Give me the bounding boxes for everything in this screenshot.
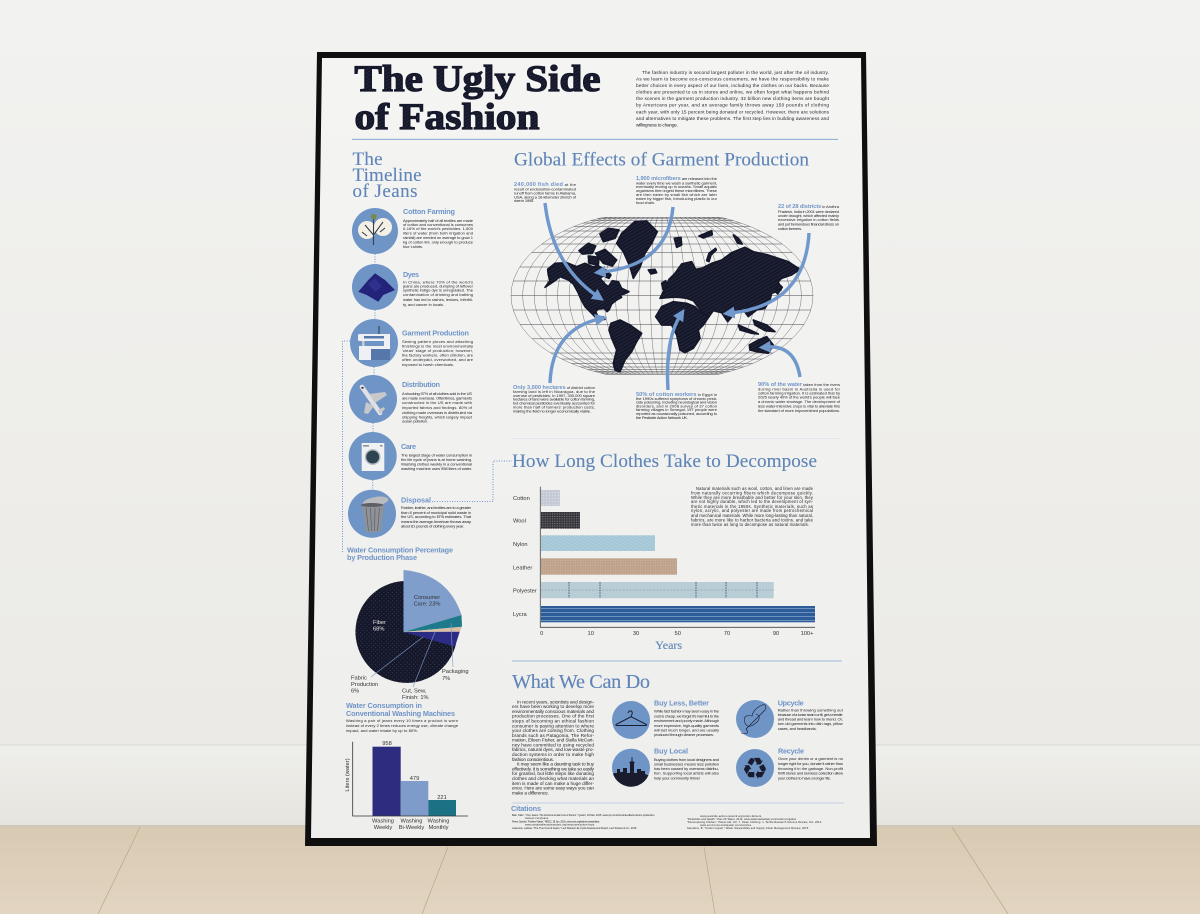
- text: buy less better: produced through cleaner processes.: [654, 732, 714, 737]
- text: garment production: 'clean' stage of production; however,: [402, 348, 473, 353]
- intro paragraph: clothes are presented to us in stores and online, we often forget what happens behind: [636, 90, 829, 94]
- text: care: the life cycle of jeans is at home washing.: [401, 457, 472, 462]
- callout: water: a chronic water shortage. The development of: [758, 399, 841, 404]
- timeline connectors: [342, 254, 512, 553]
- bar chart: washing frequency: 958: [382, 741, 392, 747]
- text: upcycle: Upcycle: [778, 699, 804, 708]
- bar chart: washing frequency: Weekly: [374, 825, 392, 831]
- callout: microfibers: water every time we wash a synthetic garment,: [636, 180, 717, 186]
- heading: water consumption percentage: [347, 546, 453, 562]
- text: cotton farming: 0-16% of the world's pesticides. 1,500: [403, 226, 474, 231]
- callout: water: [758, 382, 841, 413]
- text: what we can do paragraph: environmentally conscious materials and: [512, 709, 594, 714]
- bar chart: washing frequency: Washing: [428, 818, 449, 824]
- icon: skyline: [612, 748, 650, 787]
- text: recycle: throwing it in the garbage. Non-profit: [778, 766, 844, 771]
- timeline: cotton farming: [352, 207, 474, 254]
- heading: what we can do: What We Can Do: [512, 671, 650, 693]
- intro paragraph: willingness to change.: [636, 122, 678, 128]
- text: decomposition explanation: nylon, acrylic, and polyester are made from petrochemical: [691, 508, 813, 513]
- bar chart: decomposition: Polyester: [513, 588, 537, 594]
- citations: Perez, Sandra. "Fashion Waste." NRDC, 18 Jan. 2016, www.nrdc.org/fashion-waste/facts.: [512, 820, 600, 824]
- bar chart: decomposition: 30: [633, 631, 639, 637]
- heading: water consumption percentage: by Production Phase: [347, 553, 417, 562]
- heading: The Timeline of Jeans: [352, 149, 422, 202]
- heading: global effects: Global Effects of Garment Production: [514, 150, 809, 171]
- text: buy less better: will last much longer, and are usually: [654, 728, 720, 733]
- text: what we can do paragraph: In recent years, scientists and design-: [517, 699, 594, 704]
- text: care: [401, 442, 472, 471]
- text: decomposition explanation: and mechanical materials. While more long-lasting than natural,: [691, 513, 813, 518]
- heading and text: washing machines: instead of every 2 times reduces energy use, climate change: [346, 723, 459, 728]
- icon: needle and thread: [736, 700, 774, 738]
- citations: [511, 804, 822, 830]
- bar chart: washing frequency: Washing: [372, 818, 394, 824]
- bar chart: decomposition: Cotton: [513, 496, 530, 502]
- action: upcycle: [736, 699, 844, 738]
- bar chart: washing frequency: Liters (water): [345, 758, 351, 792]
- pie chart: water consumption: 7%: [442, 676, 450, 682]
- text: what we can do paragraph: make a difference.: [512, 790, 549, 795]
- pie chart: water consumption: Production: [351, 682, 378, 688]
- callout: districts: cotton farmers.: [778, 226, 802, 231]
- map graticule: [510, 217, 814, 375]
- intro paragraph: the scenes in the garment production industry. 32 billion new clothing items are bought: [636, 96, 830, 101]
- text: decomposition explanation: thetic materials in the 1950s. Synthetic materials, such as: [691, 504, 813, 509]
- text: buy less better: more expensive, high-quality garments: [654, 723, 719, 728]
- heading and text: washing machines: Water Consumption in: [346, 701, 422, 710]
- timeline: care: [349, 432, 472, 480]
- pie chart: water consumption: Consumer: [414, 595, 440, 601]
- icon: cotton: [352, 208, 398, 254]
- heading: The Timeline of Jeans: The: [352, 149, 382, 170]
- arrows to map: [545, 203, 809, 390]
- bar chart: decomposition: Nylon: [513, 542, 528, 548]
- bar chart: washing frequency: 479: [410, 776, 419, 782]
- text: what we can do paragraph: for granted, but little steps like donating: [512, 771, 594, 776]
- text: what we can do paragraph: effectively. It is something we take so easily: [512, 766, 595, 771]
- text: distribution: shipping freights, which largely impact: [402, 414, 473, 420]
- text: distribution: are made overseas. Oftentimes, garments: [402, 396, 472, 400]
- text: cotton farming: [403, 207, 474, 249]
- callout: microfibers: organisms then ingest these microfibers. These: [636, 188, 718, 193]
- text: buy less better: environment and poorly made. Although: [654, 718, 719, 723]
- callout: fish: result of endosulfan-contaminated: [514, 186, 576, 192]
- callout: water: 90% of the water taken from the rivers: [758, 382, 840, 388]
- bar chart: washing frequency: Washing: [401, 818, 422, 824]
- callout: water: cotton farming irrigation. It is estimated that by: [758, 390, 841, 396]
- callout: microfibers: food chain.: [636, 200, 655, 205]
- citations: www.sustainablecottonproject.org/resources/cotton-facts.: [525, 822, 595, 826]
- callout: districts: and put tremendous financial stress on: [778, 222, 839, 226]
- callout: districts: Pradesh, India in 2001 were declared: [778, 209, 839, 214]
- callout: fish: runoff from cotton farms in Alabama,: [514, 190, 576, 196]
- intro paragraph: The fashion industry is second largest polluter in the world, just after the oil industry.: [642, 70, 829, 75]
- callout: hectares: making the field no longer economically viable.: [513, 408, 591, 414]
- text: buy local: has been caused by overseas distribu-: [654, 766, 720, 771]
- map continents: [545, 221, 800, 372]
- bar chart: washing frequency: [345, 741, 468, 831]
- text: dyes: jeans are produced, dumping of leftover: [402, 284, 474, 288]
- text: recycle: your clothes to have a longer life.: [778, 776, 831, 780]
- text: disposal: [401, 496, 472, 528]
- text: what we can do paragraph: fabrics, natural dyes, and low-waste pro-: [512, 747, 594, 752]
- text: garment production: often underpaid, overworked, and are: [402, 357, 474, 362]
- text: cotton farming: four t-shirts.: [403, 244, 423, 249]
- action: buy less better: [612, 699, 720, 739]
- poster frame: [305, 52, 877, 846]
- text: decomposition explanation: fabrics, are more like to harbor bacteria and toxins, and take: [691, 518, 814, 522]
- heading and text: washing machines: [346, 701, 459, 733]
- text: recycle: [778, 746, 844, 780]
- text: decomposition explanation: While they are more breathable and better for your skin, they: [691, 495, 814, 500]
- icon: dye pile: [352, 264, 398, 310]
- pie chart: water consumption: Finish: 1%: [402, 695, 429, 701]
- text: dyes: [402, 270, 474, 307]
- bar chart: decomposition: 10: [588, 631, 594, 637]
- callout: cotton workers: disorders, and in 2008 survey of 37 cotton: [636, 404, 717, 408]
- text: distribution: constructed in the US are made with: [402, 400, 472, 405]
- text: disposal: Disposal: [401, 496, 431, 504]
- text: dyes: water has led to rashes, lesions, infertili-: [403, 297, 474, 302]
- callout: cotton workers: cide poisoning, including neurological and vision: [636, 400, 717, 404]
- text: buy less better: Buy Less, Better: [654, 699, 709, 708]
- callout: cotton workers: [636, 392, 718, 420]
- action: recycle: [736, 746, 844, 787]
- text: decomposition explanation: from naturally occurring fibers which decompose quickly.: [691, 490, 813, 496]
- callout: districts: [778, 204, 840, 231]
- callout: hectares: [513, 385, 596, 414]
- pie chart: water consumption: 68%: [373, 626, 384, 632]
- text: buy local: help your community thrive!: [654, 776, 700, 781]
- text: what we can do paragraph: mation, Eileen Fisher, and Stella McCart-: [512, 738, 594, 743]
- callout: cotton workers: 50% of cotton workers in Egypt in: [636, 392, 717, 398]
- citations: www.pesticide-action-network.org/cotton-farmers.: [700, 814, 762, 818]
- text: buy less better: [654, 699, 720, 737]
- text: buy less better: While fast fashion may seem easy in the: [654, 709, 720, 714]
- text: upcycle: cases, and headbands.: [778, 726, 817, 731]
- timeline: distribution: [349, 375, 473, 424]
- citations: Citations: [511, 804, 541, 813]
- icon: airplane: [349, 375, 397, 423]
- intro paragraph: [636, 70, 830, 128]
- text: care: The largest stage of water consumption in: [401, 452, 472, 458]
- timeline: disposal: [348, 490, 472, 538]
- citations: "Decomposing Clothes." Planet Aid, Vol. 7, Clean Clothing, 1, Textile Research Science Review, Oct. 2014.: [687, 820, 822, 824]
- callout: microfibers: 1,900 microfibers are released into the: [636, 176, 718, 182]
- text: upcycle: and thread and learn how to mend. Or,: [778, 716, 843, 721]
- text: what we can do paragraph: fashion conscientious.: [512, 757, 554, 762]
- bar chart: decomposition: 100+: [801, 631, 814, 637]
- bar chart: decomposition: 90: [773, 631, 779, 637]
- intro paragraph: As we learn to become eco-conscious consumers, we have the responsibility to make: [636, 76, 829, 82]
- bar chart: decomposition: 0: [540, 631, 543, 637]
- title: The Ugly Side: [354, 58, 600, 99]
- text: distribution: Distribution: [402, 380, 440, 389]
- timeline: garment production: [350, 319, 474, 367]
- text: what we can do paragraph: ers have been working to develop more: [512, 704, 594, 709]
- icon: recycle: ♻: [742, 752, 768, 787]
- action: buy local: [612, 748, 719, 787]
- text: buy local: Buy Local: [654, 746, 688, 755]
- callout: water: 2025 nearly 40% of the world's people will face: [758, 394, 841, 400]
- text: recycle: thrift stores and services collection allow: [778, 770, 843, 776]
- text: buy less better: cost is cheap, we forget it's harmful to the: [654, 714, 720, 719]
- text: dyes: ty, and cancer in locals.: [403, 302, 444, 307]
- callout: microfibers: eventually ending up in oceans. Small aquatic: [636, 184, 717, 189]
- callout: microfibers: are then eaten by small fish which are later: [636, 192, 718, 197]
- pie chart: water consumption: [351, 570, 469, 701]
- callout: hectares: overuse of pesticides. In 1997, 330,000 square: [513, 393, 596, 398]
- icon: washing machine: [349, 432, 397, 480]
- citations: www.qz.com/jeans.: [525, 816, 549, 820]
- text: what we can do paragraph: clothes and checking what materials an: [512, 776, 594, 781]
- callout: cotton workers: the 1990s suffered symptoms of chronic pesti-: [636, 396, 718, 401]
- text: what we can do paragraph: consumer is paying attention to where: [512, 723, 594, 728]
- text: buy local: Buying clothes from local designers and: [654, 757, 719, 762]
- text: dyes: synthetic indigo dye is unregulated. The: [403, 288, 474, 292]
- intro paragraph: by Americans per year, and an average family throws away 150 pounds of clothing: [636, 102, 829, 108]
- bar chart: decomposition: Wool: [513, 519, 526, 525]
- callout: districts: under drought, which affected mainly: [778, 213, 840, 218]
- text: what we can do paragraph: ney have committed to using recycled: [512, 742, 594, 747]
- text: garment production: the factory workers, often children, are: [402, 352, 474, 358]
- callout: hectares: farming land is left in Nicaragua, due to the: [513, 389, 596, 394]
- text: decomposition explanation: are not highly durable, which led to the development of syn-: [691, 499, 814, 504]
- text: cotton farming: liters of water (from both irrigation and: [403, 230, 473, 236]
- heading: The Timeline of Jeans: Timeline: [352, 165, 422, 186]
- callout: water: less water-intensive crops is vital to alleviate this: [758, 404, 840, 408]
- title: of Fashion: [354, 96, 540, 137]
- callout: water: the standard of more impoverished populations.: [758, 408, 840, 413]
- text: cotton farming: Cotton Farming: [403, 207, 455, 216]
- text: what we can do paragraph: item is made of can make a huge differ-: [512, 781, 594, 786]
- callout: hectares: but chemical pesticides eventually accounted for: [513, 400, 596, 406]
- text: disposal: the US, according to EPA estimates. That: [401, 514, 472, 519]
- text: disposal: means the average American throws away: [401, 519, 472, 524]
- intro paragraph: and alternatives to mitigate these problems. The first step lies in building awareness and: [636, 116, 829, 121]
- intro paragraph: each year, with only 15 percent being donated or recycled. However, there are solutions: [636, 110, 830, 114]
- text: decomposition explanation: [691, 486, 814, 527]
- title: [354, 58, 600, 137]
- callout: cotton workers: reported as occasionally poisoned, according to: [636, 411, 718, 416]
- text: distribution: A shocking 97% of all clothes sold in the US: [402, 391, 472, 396]
- timeline: dyes: [352, 264, 474, 310]
- callout: cotton workers: the Pesticide Action Network UK.: [636, 415, 688, 420]
- text: care: Washing clothes weekly in a conventional: [401, 462, 472, 466]
- callout: fish: 240,000 fish died at the: [514, 182, 577, 188]
- text: cotton farming: rainfall) are needed on average to grow 1: [403, 235, 474, 240]
- heading and text: washing machines: Washing a pair of jeans every 10 times a product is worn: [346, 718, 458, 723]
- citations: Saunders, B. "Cotton Impact." Water Stewardship and Supply Chain Management Review, 2015.: [687, 826, 809, 830]
- citations: Lawrence, Larissa. "The True Cost of Jeans." Levi Strauss Life Cycle Assessment Report, Levi Strauss & Co., 2015.: [512, 826, 637, 830]
- text: what we can do paragraph: brands such as Patagonia, The Refor-: [512, 733, 594, 738]
- text: what we can do paragraph: It may seem like a daunting task to buy: [517, 762, 595, 767]
- callout: cotton workers: farming villages in Senegal, 197 people were: [636, 407, 718, 412]
- heading: water consumption percentage: Water Consumption Percentage: [347, 546, 453, 554]
- text: upcycle: because of a loose seam or fit, get a needle: [778, 712, 843, 717]
- heading: how long clothes take to decompose: How Long Clothes Take to Decompose: [512, 451, 817, 472]
- pie chart: water consumption: Packaging: [442, 669, 469, 675]
- citations: www.environmentalleader.com/textiles.: [700, 823, 752, 827]
- pie chart: water consumption: Cut, Sew,: [402, 688, 427, 694]
- bar chart: decomposition: 70: [724, 631, 730, 637]
- pie chart: water consumption: Fiber: [373, 620, 386, 626]
- text: distribution: imported fabrics and findings. 80% of: [402, 405, 473, 410]
- text: care: Care: [401, 442, 416, 451]
- text: distribution: clothing made overseas is distributed via: [402, 410, 473, 415]
- callout: districts: 22 of 28 districts in Andhra: [778, 204, 840, 210]
- text: garment production: Garment Production: [402, 328, 469, 338]
- text: upcycle: Rather than throwing something out: [778, 708, 844, 713]
- callout: hectares: Only 3,000 hectares of district cotton: [513, 385, 595, 391]
- callout: fish: river in 1995.: [514, 198, 534, 203]
- text: what we can do paragraph: steps of becoming an ethical fashion: [512, 718, 594, 724]
- bar chart: decomposition: Leather: [513, 566, 532, 572]
- text: dyes: In China, where 70% of the world's: [403, 280, 473, 284]
- text: cotton farming: kg of cotton lint, only enough to produce: [403, 240, 474, 244]
- callout: fish: [514, 182, 577, 203]
- text: what we can do paragraph: your clothes are coming from. Clothing: [512, 728, 594, 733]
- icon: sewing machine: [350, 319, 398, 367]
- text: garment production: Sewing pattern pieces and attaching: [402, 339, 473, 344]
- citations: Bain, Marc. "Your Jeans: The Environmental Cost of Denim." Quartz, 10 Mar. 2015, www.qz.com/chemical-effects-denim-production.: [512, 813, 655, 817]
- pie chart: water consumption: 6%: [351, 688, 359, 694]
- callout: hectares: hectares of land were available for cotton farming,: [513, 396, 595, 402]
- text: buy local: tion. Supporting local artists will also: [654, 771, 720, 776]
- text: decomposition explanation: Natural materials such as wool, cotton, and linen are made: [696, 486, 814, 491]
- text: buy local: [654, 746, 720, 781]
- text: cotton farming: Approximately half of all textiles are made: [403, 218, 474, 223]
- callout: districts: excessive irrigation in cotton fields: [778, 217, 839, 222]
- text: care: washing machine uses 958 liters of water.: [401, 466, 472, 471]
- text: recycle: Once your denim or a garment is no: [778, 756, 844, 761]
- bar chart: decomposition: 50: [675, 631, 681, 637]
- world map: [510, 217, 814, 375]
- text: upcycle: turn old garments into dish rags, pillow: [778, 721, 843, 726]
- heading: The Timeline of Jeans: of Jeans: [352, 181, 418, 202]
- icon: trash can: [348, 490, 396, 538]
- bar chart: washing frequency: Bi-Weekly: [399, 825, 424, 831]
- bar chart: decomposition: [513, 487, 815, 652]
- text: decomposition explanation: more than twice as long to decompose as natural materials.: [691, 522, 809, 527]
- citations: "Pesticides and Health." Pan-UK Water, 2013, www.wateruseitwisely.com/cotton-irrigation.: [687, 817, 797, 821]
- bar chart: decomposition: Lycra: [513, 612, 528, 618]
- text: recycle: longer right for you, donate it rather than: [778, 761, 843, 766]
- text: distribution: [402, 380, 473, 424]
- icon: hanger: [612, 701, 650, 739]
- heading and text: washing machines: Conventional Washing Machines: [346, 709, 455, 718]
- callout: microfibers: [636, 176, 718, 205]
- text: cotton farming: of cotton and conventional is consumes: [403, 222, 473, 227]
- text: recycle: Recycle: [778, 746, 804, 755]
- text: disposal: than 8 percent of municipal solid waste in: [401, 510, 471, 515]
- callout: microfibers: eaten by bigger fish, introducing plastic to our: [636, 196, 718, 201]
- callout: water: during river basin in Australia is used for: [758, 386, 841, 392]
- bar chart: washing frequency: 221: [437, 795, 447, 801]
- text: dyes: contamination of drinking and bathing: [403, 292, 473, 297]
- text: disposal: about 81 pounds of clothing every year.: [401, 524, 464, 528]
- text: disposal: Rubber, leather, and textiles are to a greater: [401, 505, 472, 510]
- text: garment production: [402, 328, 474, 367]
- pie chart: water consumption: Care: 23%: [414, 602, 440, 608]
- text: buy local: small businesses means less pollution: [654, 762, 719, 766]
- text: distribution: ocean pollution.: [402, 418, 428, 424]
- heading and text: washing machines: impact, and water intake by up to 80%.: [346, 728, 418, 733]
- text: upcycle: [778, 699, 844, 731]
- bar chart: decomposition: Years: [655, 638, 682, 652]
- pie chart: water consumption: Fabric: [351, 676, 367, 682]
- text: dyes: Dyes: [403, 270, 419, 279]
- text: what we can do paragraph: production processes. One of the first: [512, 714, 595, 719]
- text: what we can do paragraph: duction systems in order to make high: [512, 752, 594, 757]
- callout: fish: USA, along a 16-kilometer stretch of: [514, 194, 577, 200]
- bar chart: washing frequency: Monthly: [429, 825, 449, 831]
- text: garment production: exposed to harsh chemicals.: [402, 362, 454, 367]
- callout: hectares: more than half of farmers' production costs,: [513, 404, 595, 410]
- text: what we can do paragraph: ence. Here are some easy ways you can: [512, 786, 594, 791]
- text: what we can do paragraph: [512, 699, 595, 795]
- intro paragraph: better choices in every aspect of our lives, including the clothes on our backs. Because: [636, 83, 829, 88]
- text: garment production: finishings is the most environmentally: [402, 344, 474, 348]
